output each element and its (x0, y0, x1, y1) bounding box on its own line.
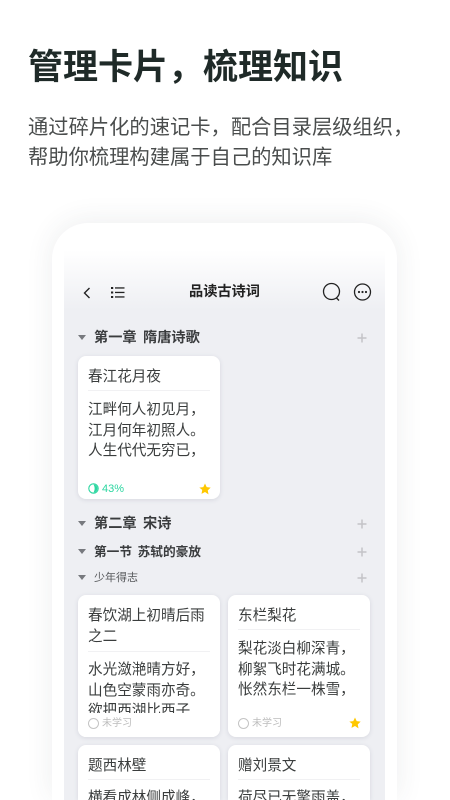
icon: star (350, 718, 361, 728)
card title: 春饮湖上初晴后雨 (88, 608, 205, 624)
card title (88, 607, 205, 645)
card body: 欲把西湖比西子 (88, 703, 190, 719)
card: 东栏梨花 (228, 595, 370, 737)
card body (238, 640, 355, 698)
card: 春江花月夜 (78, 356, 220, 499)
card title: 东栏梨花 (238, 608, 296, 624)
subtitle text: 帮助你梳理构建属于自己的知识库 (28, 146, 332, 168)
card body (88, 661, 205, 719)
icon: progress ring (88, 483, 99, 494)
chapter 2 heading (78, 516, 366, 532)
chapter 2 arrow (78, 521, 86, 526)
subsection heading (78, 572, 366, 584)
section plus (358, 548, 366, 556)
card body: 江月何年初照人。 (88, 422, 205, 438)
chapter 1 text: 第一章 隋唐诗歌 (94, 330, 200, 346)
phone mockup (52, 223, 397, 800)
icon: search (322, 282, 340, 301)
chapter 1 plus (358, 334, 366, 342)
card: 赠刘景文 (228, 745, 370, 800)
card: 春饮湖上初晴后雨之二 (78, 595, 220, 737)
chapter 2 text: 第二章 宋诗 (94, 516, 171, 532)
progress (88, 483, 124, 495)
card: 题西林壁 (78, 745, 220, 800)
icon: back arrow (84, 288, 90, 298)
card body: 柳絮飞时花满城。 (238, 662, 355, 678)
screen title: 品读古诗词 (189, 284, 260, 300)
section heading (78, 545, 366, 559)
card body: 梨花淡白柳深青， (238, 641, 355, 657)
card title: 之二 (88, 629, 117, 645)
icon: list (111, 287, 124, 298)
section arrow (78, 549, 86, 554)
chapter 2 plus (358, 520, 366, 528)
progress value: 43% (102, 483, 124, 495)
section text: 第一节 苏轼的豪放 (94, 545, 201, 559)
icon: more (354, 283, 372, 301)
subsection arrow (78, 575, 86, 580)
icon: star (200, 484, 211, 494)
card body: 江畔何人初见月， (88, 402, 205, 418)
chapter 1 heading (78, 330, 366, 346)
status (88, 717, 132, 729)
status (238, 717, 282, 729)
phone screen background (64, 250, 385, 800)
card body (88, 401, 205, 459)
subtitle text (28, 116, 413, 168)
subtitle text: 通过碎片化的速记卡，配合目录层级组织， (28, 117, 413, 139)
card title: 题西林壁 (88, 758, 146, 774)
card body: 人生代代无穷已， (88, 443, 205, 459)
card title: 赠刘景文 (238, 758, 296, 774)
title: 管理卡片，梳理知识 (28, 48, 343, 87)
status: 未学习 (252, 718, 282, 729)
card body: 怅然东栏一株雪， (238, 682, 355, 698)
card body: 水光潋滟晴方好， (88, 662, 205, 678)
chapter 1 arrow (78, 335, 86, 340)
subsection plus (358, 574, 366, 582)
card title: 春江花月夜 (88, 369, 161, 385)
card body: 山色空蒙雨亦奇。 (88, 682, 205, 698)
subsection text: 少年得志 (94, 572, 138, 584)
status: 未学习 (102, 718, 132, 729)
